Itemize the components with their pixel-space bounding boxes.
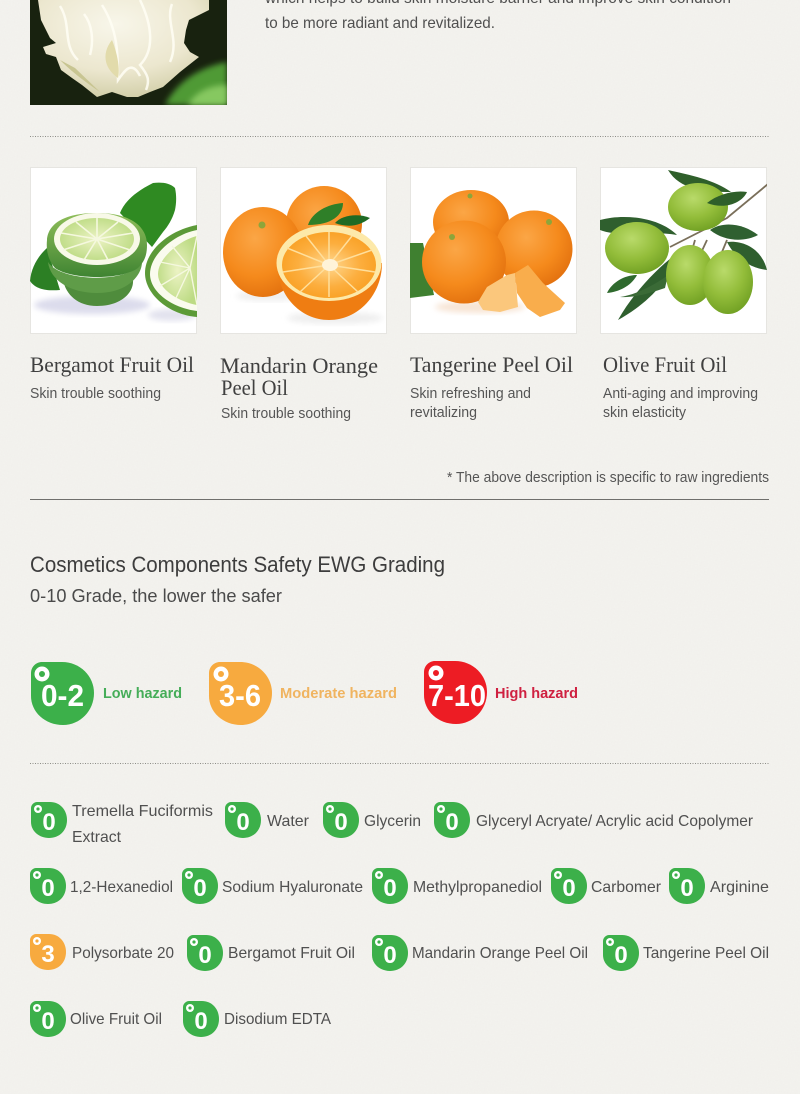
ingredient: hexanediol bbox=[30, 868, 173, 904]
ingredient grade list bbox=[30, 802, 769, 1037]
name: Olive Fruit Oil bbox=[603, 352, 727, 377]
image: bergamot bbox=[30, 168, 197, 334]
ingredient: glycerin: 0 bbox=[334, 809, 348, 836]
ingredient: polysorbate 20: 3 bbox=[41, 941, 55, 968]
ingredient: hexanediol: 1,2-Hexanediol bbox=[70, 879, 173, 896]
photo: white tremella flower bbox=[30, 0, 227, 105]
heading: EWG grading: Cosmetics Components Safety EWG Grading bbox=[30, 552, 445, 577]
ingredient: carbomer: Carbomer bbox=[591, 879, 662, 896]
benefit: Skin trouble soothing bbox=[30, 385, 161, 402]
badge: 0-2 bbox=[31, 662, 94, 725]
ingredient: tremella: Extract bbox=[72, 829, 122, 846]
ingredient: tangerine peel oil bbox=[603, 935, 769, 971]
ingredient: olive fruit oil: Olive Fruit Oil bbox=[70, 1011, 162, 1028]
ingredient: bergamot fruit oil: Bergamot Fruit Oil bbox=[228, 945, 355, 962]
label: high hazard: High hazard bbox=[495, 685, 578, 702]
benefit: Skin refreshing and bbox=[410, 385, 531, 402]
ingredient: carbomer bbox=[551, 868, 662, 904]
ingredient: tangerine peel oil: 0 bbox=[614, 942, 628, 969]
benefit: Skin trouble soothing bbox=[221, 405, 351, 422]
image: olives bbox=[600, 168, 768, 334]
ingredient: mandarin orange peel oil bbox=[372, 935, 588, 971]
ingredient: disodium edta: 0 bbox=[194, 1008, 208, 1035]
ingredient: tremella: Tremella Fuciformis bbox=[72, 803, 213, 820]
legend: hazard grades bbox=[31, 661, 578, 725]
name: Bergamot Fruit Oil bbox=[30, 352, 194, 377]
ingredient: arginine: 0 bbox=[680, 875, 694, 902]
benefit bbox=[603, 385, 758, 421]
ingredient: tremella: 0 bbox=[42, 809, 56, 836]
ingredient: water: 0 bbox=[236, 809, 250, 836]
ingredient: disodium edta: Disodium EDTA bbox=[224, 1011, 331, 1028]
ingredient: arginine: Arginine bbox=[710, 879, 769, 896]
ingredient: arginine bbox=[669, 868, 769, 904]
ingredient: bergamot fruit oil bbox=[187, 935, 355, 971]
panel: bergamot fruit oil bbox=[30, 168, 197, 402]
badge: 0-2: 0-2 bbox=[41, 678, 84, 713]
ingredient: sodium hyaluronate: 0 bbox=[193, 875, 207, 902]
ingredient: tangerine peel oil: Tangerine Peel Oil bbox=[643, 945, 769, 962]
ingredient: glycerin: Glycerin bbox=[364, 813, 421, 830]
image: tangerines bbox=[410, 168, 576, 334]
benefit bbox=[410, 385, 531, 421]
benefit: skin elasticity bbox=[603, 404, 686, 421]
ingredient: mandarin orange peel oil: Mandarin Orange Peel Oil bbox=[412, 945, 588, 962]
image: mandarin oranges bbox=[220, 168, 386, 334]
ingredient: olive fruit oil: 0 bbox=[41, 1008, 55, 1035]
ingredient: polysorbate 20: Polysorbate 20 bbox=[72, 945, 174, 962]
benefit: Anti-aging and improving bbox=[603, 385, 758, 402]
ingredient: glyceryl acrylate copolymer bbox=[434, 802, 754, 838]
ingredient: tremella bbox=[31, 802, 213, 846]
badge: 7-10 bbox=[424, 661, 487, 724]
ingredient: carbomer: 0 bbox=[562, 875, 576, 902]
ingredient: hexanediol: 0 bbox=[41, 875, 55, 902]
panel: mandarin orange peel oil bbox=[220, 168, 386, 422]
benefit: revitalizing bbox=[410, 404, 477, 421]
name: Tangerine Peel Oil bbox=[410, 352, 573, 377]
label: moderate hazard: Moderate hazard bbox=[280, 685, 397, 702]
name bbox=[220, 353, 378, 400]
intro text bbox=[264, 0, 731, 32]
ingredient: glyceryl acrylate copolymer: 0 bbox=[445, 809, 459, 836]
ingredient: methylpropanediol: 0 bbox=[383, 875, 397, 902]
ingredient: sodium hyaluronate: Sodium Hyaluronate bbox=[222, 879, 363, 896]
ingredient: methylpropanediol: Methylpropanediol bbox=[413, 879, 542, 896]
label: low hazard: Low hazard bbox=[103, 685, 182, 702]
ingredient: polysorbate 20 bbox=[30, 934, 174, 970]
ingredient: water bbox=[225, 802, 310, 838]
ingredient: methylpropanediol bbox=[372, 868, 542, 904]
badge: 3-6: 3-6 bbox=[219, 678, 261, 713]
ingredient: glycerin bbox=[323, 802, 421, 838]
ingredient: olive fruit oil bbox=[30, 1001, 162, 1037]
intro text: to be more radiant and revitalized. bbox=[265, 15, 495, 32]
ingredient: water: Water bbox=[267, 813, 310, 830]
ingredient: glyceryl acrylate copolymer: Glyceryl Acryate/ Acrylic acid Copolymer bbox=[476, 813, 754, 830]
ingredient: bergamot fruit oil: 0 bbox=[198, 942, 212, 969]
ingredient: sodium hyaluronate bbox=[182, 868, 363, 904]
panel: olive fruit oil bbox=[600, 168, 768, 421]
footnote: * The above description is specific to raw ingredients bbox=[447, 469, 769, 486]
ingredient: disodium edta bbox=[183, 1001, 331, 1037]
name: Peel Oil bbox=[221, 375, 288, 400]
subheading: 0-10 Grade, the lower the safer bbox=[30, 586, 282, 606]
badge: 3-6 bbox=[209, 662, 272, 725]
name: Mandarin Orange bbox=[220, 353, 378, 378]
ingredient: mandarin orange peel oil: 0 bbox=[383, 942, 397, 969]
badge: 7-10: 7-10 bbox=[428, 678, 486, 713]
panel: tangerine peel oil bbox=[410, 168, 576, 421]
